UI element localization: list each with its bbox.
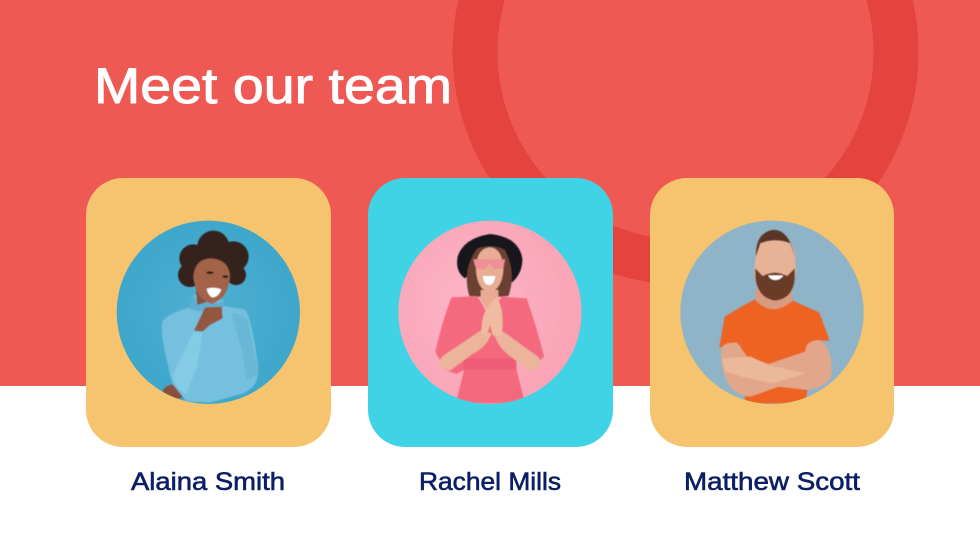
portrait: bearded man in orange t-shirt [680,221,864,404]
title: Meet our team [94,58,452,114]
name: Matthew Scott [684,468,860,496]
card background [368,178,613,447]
decorative ring [475,0,896,262]
portrait: woman in pink dress and hat [398,221,582,404]
portrait: woman in blue turtleneck [117,221,300,404]
panel: Rachel Mills [368,178,613,496]
card background [86,178,331,447]
red header background [0,0,980,386]
panel: Alaina Smith [86,178,331,496]
name: Alaina Smith [131,468,285,496]
panel: Matthew Scott [650,178,894,496]
card background [650,178,894,447]
name: Rachel Mills [419,468,561,496]
